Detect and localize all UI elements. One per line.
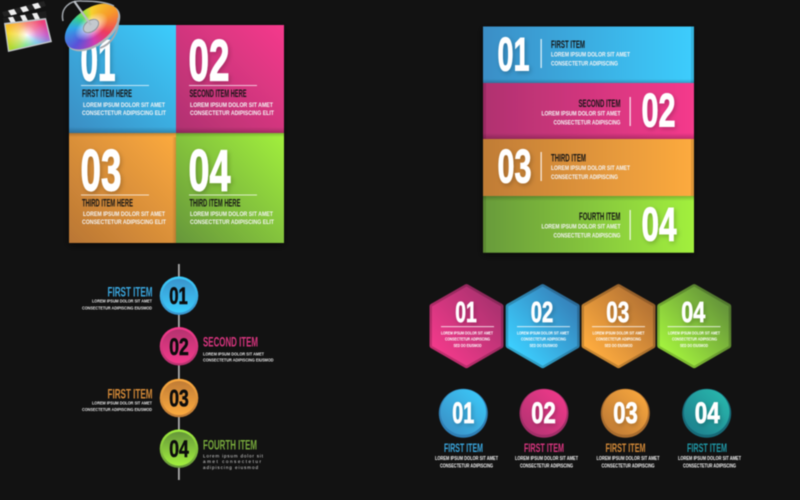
hexagon 01 pink: 01: [455, 297, 477, 329]
timeline step 02: LOREM IPSUM DOLOR SIT AMET: [203, 352, 264, 357]
hexagon 03 orange: [584, 287, 653, 366]
circle item 03 orange: 03: [613, 397, 638, 430]
circle item 01 blue: LOREM IPSUM DOLOR SIT AMET: [435, 456, 499, 462]
tile 01 blue: 01: [80, 28, 116, 94]
icon: motion app logo: [61, 0, 121, 52]
timeline step 04: 04: [169, 436, 189, 463]
circle item 04 teal: [678, 389, 742, 470]
band 02 pink: 02: [642, 84, 676, 136]
circle item 02 pink: CONSECTETUR ADIPISCING: [520, 464, 573, 470]
circle item 01 blue: FIRST ITEM: [444, 441, 483, 455]
timeline step 03: FIRST ITEM: [108, 386, 152, 402]
circle item 03 orange: FIRST ITEM: [606, 441, 646, 455]
band 02 pink: [483, 83, 694, 139]
band 02 pink: SECOND ITEM: [578, 98, 620, 110]
hexagon 01 pink: LOREM IPSUM DOLOR SIT AMET: [441, 330, 493, 335]
tile 03 orange: LOREM IPSUM DOLOR SIT AMET: [83, 211, 165, 218]
tile 04 green: CONSECTETUR ADIPISCING ELIT: [190, 219, 274, 226]
hexagon 03 orange: 03: [606, 297, 629, 329]
tile 03 orange: 03: [80, 138, 122, 204]
tile 04 green: 04: [188, 138, 230, 204]
tile 01 blue: [69, 25, 176, 133]
timeline step 01: [82, 276, 198, 315]
circle item 02 pink: 02: [531, 397, 556, 430]
band 01 blue: [483, 26, 694, 83]
hexagon 04 green: 04: [681, 297, 705, 329]
timeline step 04: FOURTH ITEM: [203, 436, 257, 452]
hexagon 04 green: SED DO EIUSMOD: [680, 343, 708, 348]
hexagon 01 pink: [432, 287, 501, 366]
timeline step 01: FIRST ITEM: [108, 284, 152, 300]
circle item 01 blue: CONSECTETUR ADIPISCING: [440, 464, 493, 470]
timeline step 04: [160, 429, 264, 470]
hexagon 03 orange: SED DO EIUSMOD: [604, 343, 633, 348]
icon: clapperboard app logo: [2, 2, 52, 53]
circle item 01 blue: 01: [452, 397, 474, 430]
band 03 orange: LOREM IPSUM DOLOR SIT AMET: [551, 165, 630, 172]
tile 03 orange: CONSECTETUR ADIPISCING ELIT: [82, 219, 166, 226]
hexagon 02 blue: [508, 287, 577, 366]
circle item 03 orange: CONSECTETUR ADIPISCING: [602, 464, 654, 470]
band 04 green: CONSECTETUR ADIPISCING: [554, 233, 620, 240]
timeline step 01: CONSECTETUR ADIPISCING EIUSMOD: [82, 305, 153, 310]
tile 02 pink: LOREM IPSUM DOLOR SIT AMET: [190, 102, 273, 109]
band 04 green: 04: [642, 198, 676, 250]
circle item 01 blue: [435, 389, 499, 470]
circle item 02 pink: [515, 389, 579, 470]
timeline step 02: [160, 327, 274, 366]
band 02 pink: LOREM IPSUM DOLOR SIT AMET: [542, 111, 620, 118]
timeline step 02: SECOND ITEM: [203, 334, 258, 350]
band 03 orange: CONSECTETUR ADIPISCING: [551, 174, 618, 181]
timeline step 04: adipiscing eiusmod: [203, 465, 258, 470]
hexagon 02 blue: 02: [531, 297, 553, 329]
hexagon row: [432, 287, 729, 366]
timeline step 02: 02: [169, 334, 189, 361]
circle item 04 teal: CONSECTETUR ADIPISCING: [683, 464, 736, 470]
circle item 04 teal: 04: [695, 397, 720, 430]
hexagon 04 green: CONSECTETUR ADIPISCING: [672, 337, 717, 342]
hexagon 01 pink: SED DO EIUSMOD: [454, 343, 482, 348]
tile 04 green: [176, 133, 284, 243]
hexagon 03 orange: CONSECTETUR ADIPISCING: [596, 337, 641, 342]
tile 02 pink: CONSECTETUR ADIPISCING ELIT: [190, 110, 274, 117]
hexagon 04 green: LOREM IPSUM DOLOR SIT AMET: [668, 330, 720, 335]
timeline step 01: 01: [169, 283, 188, 310]
timeline: [82, 264, 274, 480]
band 03 orange: 03: [498, 140, 532, 192]
band 04 green: LOREM IPSUM DOLOR SIT AMET: [542, 224, 620, 231]
tile 01 blue: LOREM IPSUM DOLOR SIT AMET: [83, 102, 165, 109]
band 04 green: FOURTH ITEM: [579, 211, 620, 223]
band 03 orange: [483, 139, 694, 196]
tile 01 blue: CONSECTETUR ADIPISCING ELIT: [82, 110, 166, 117]
hexagon 02 blue: SED DO EIUSMOD: [530, 343, 558, 348]
band 01 blue: 01: [498, 28, 530, 80]
tile 03 orange: [69, 133, 176, 243]
timeline step 03: LOREM IPSUM DOLOR SIT AMET: [92, 401, 152, 406]
panel: stacked horizontal bands: [483, 26, 694, 253]
hexagon 02 blue: LOREM IPSUM DOLOR SIT AMET: [517, 330, 569, 335]
band 04 green: [483, 196, 694, 253]
tile 04 green: LOREM IPSUM DOLOR SIT AMET: [190, 211, 273, 218]
tile 02 pink: SECOND ITEM HERE: [190, 88, 246, 100]
tile 02 pink: 02: [188, 28, 230, 94]
hexagon 04 green: [660, 287, 729, 366]
tile 04 green: THIRD ITEM HERE: [190, 198, 240, 210]
circle item 02 pink: LOREM IPSUM DOLOR SIT AMET: [515, 456, 579, 462]
circle item 04 teal: LOREM IPSUM DOLOR SIT AMET: [678, 456, 742, 462]
band 02 pink: CONSECTETUR ADIPISCING: [554, 120, 620, 127]
circle item 04 teal: FIRST ITEM: [687, 441, 727, 455]
hexagon 03 orange: LOREM IPSUM DOLOR SIT AMET: [592, 330, 645, 335]
hexagon 02 blue: CONSECTETUR ADIPISCING: [521, 337, 566, 342]
circle item 02 pink: FIRST ITEM: [524, 441, 564, 455]
timeline step 01: LOREM IPSUM DOLOR SIT AMET: [92, 299, 152, 304]
timeline step 03: [82, 379, 198, 417]
band 03 orange: THIRD ITEM: [551, 153, 586, 165]
circle row: [435, 389, 742, 470]
timeline step 03: 03: [169, 386, 189, 412]
timeline step 02: CONSECTETUR ADIPISCING EIUSMOD: [203, 358, 274, 363]
tile 02 pink: [176, 25, 284, 133]
band 01 blue: FIRST ITEM: [551, 39, 585, 51]
timeline step 04: amet consectetur: [203, 459, 261, 464]
circle item 03 orange: LOREM IPSUM DOLOR SIT AMET: [596, 456, 660, 462]
band 01 blue: CONSECTETUR ADIPISCING: [551, 61, 618, 68]
panel: 2x2 numbered grid: [69, 25, 284, 243]
timeline step 04: Lorem ipsum dolor sit: [203, 453, 264, 458]
hexagon 01 pink: CONSECTETUR ADIPISCING: [445, 337, 490, 342]
timeline step 03: CONSECTETUR ADIPISCING EIUSMOD: [82, 407, 153, 412]
circle item 03 orange: [596, 389, 660, 470]
tile 01 blue: FIRST ITEM HERE: [82, 88, 132, 100]
band 01 blue: LOREM IPSUM DOLOR SIT AMET: [551, 52, 630, 59]
tile 03 orange: THIRD ITEM HERE: [82, 198, 133, 210]
